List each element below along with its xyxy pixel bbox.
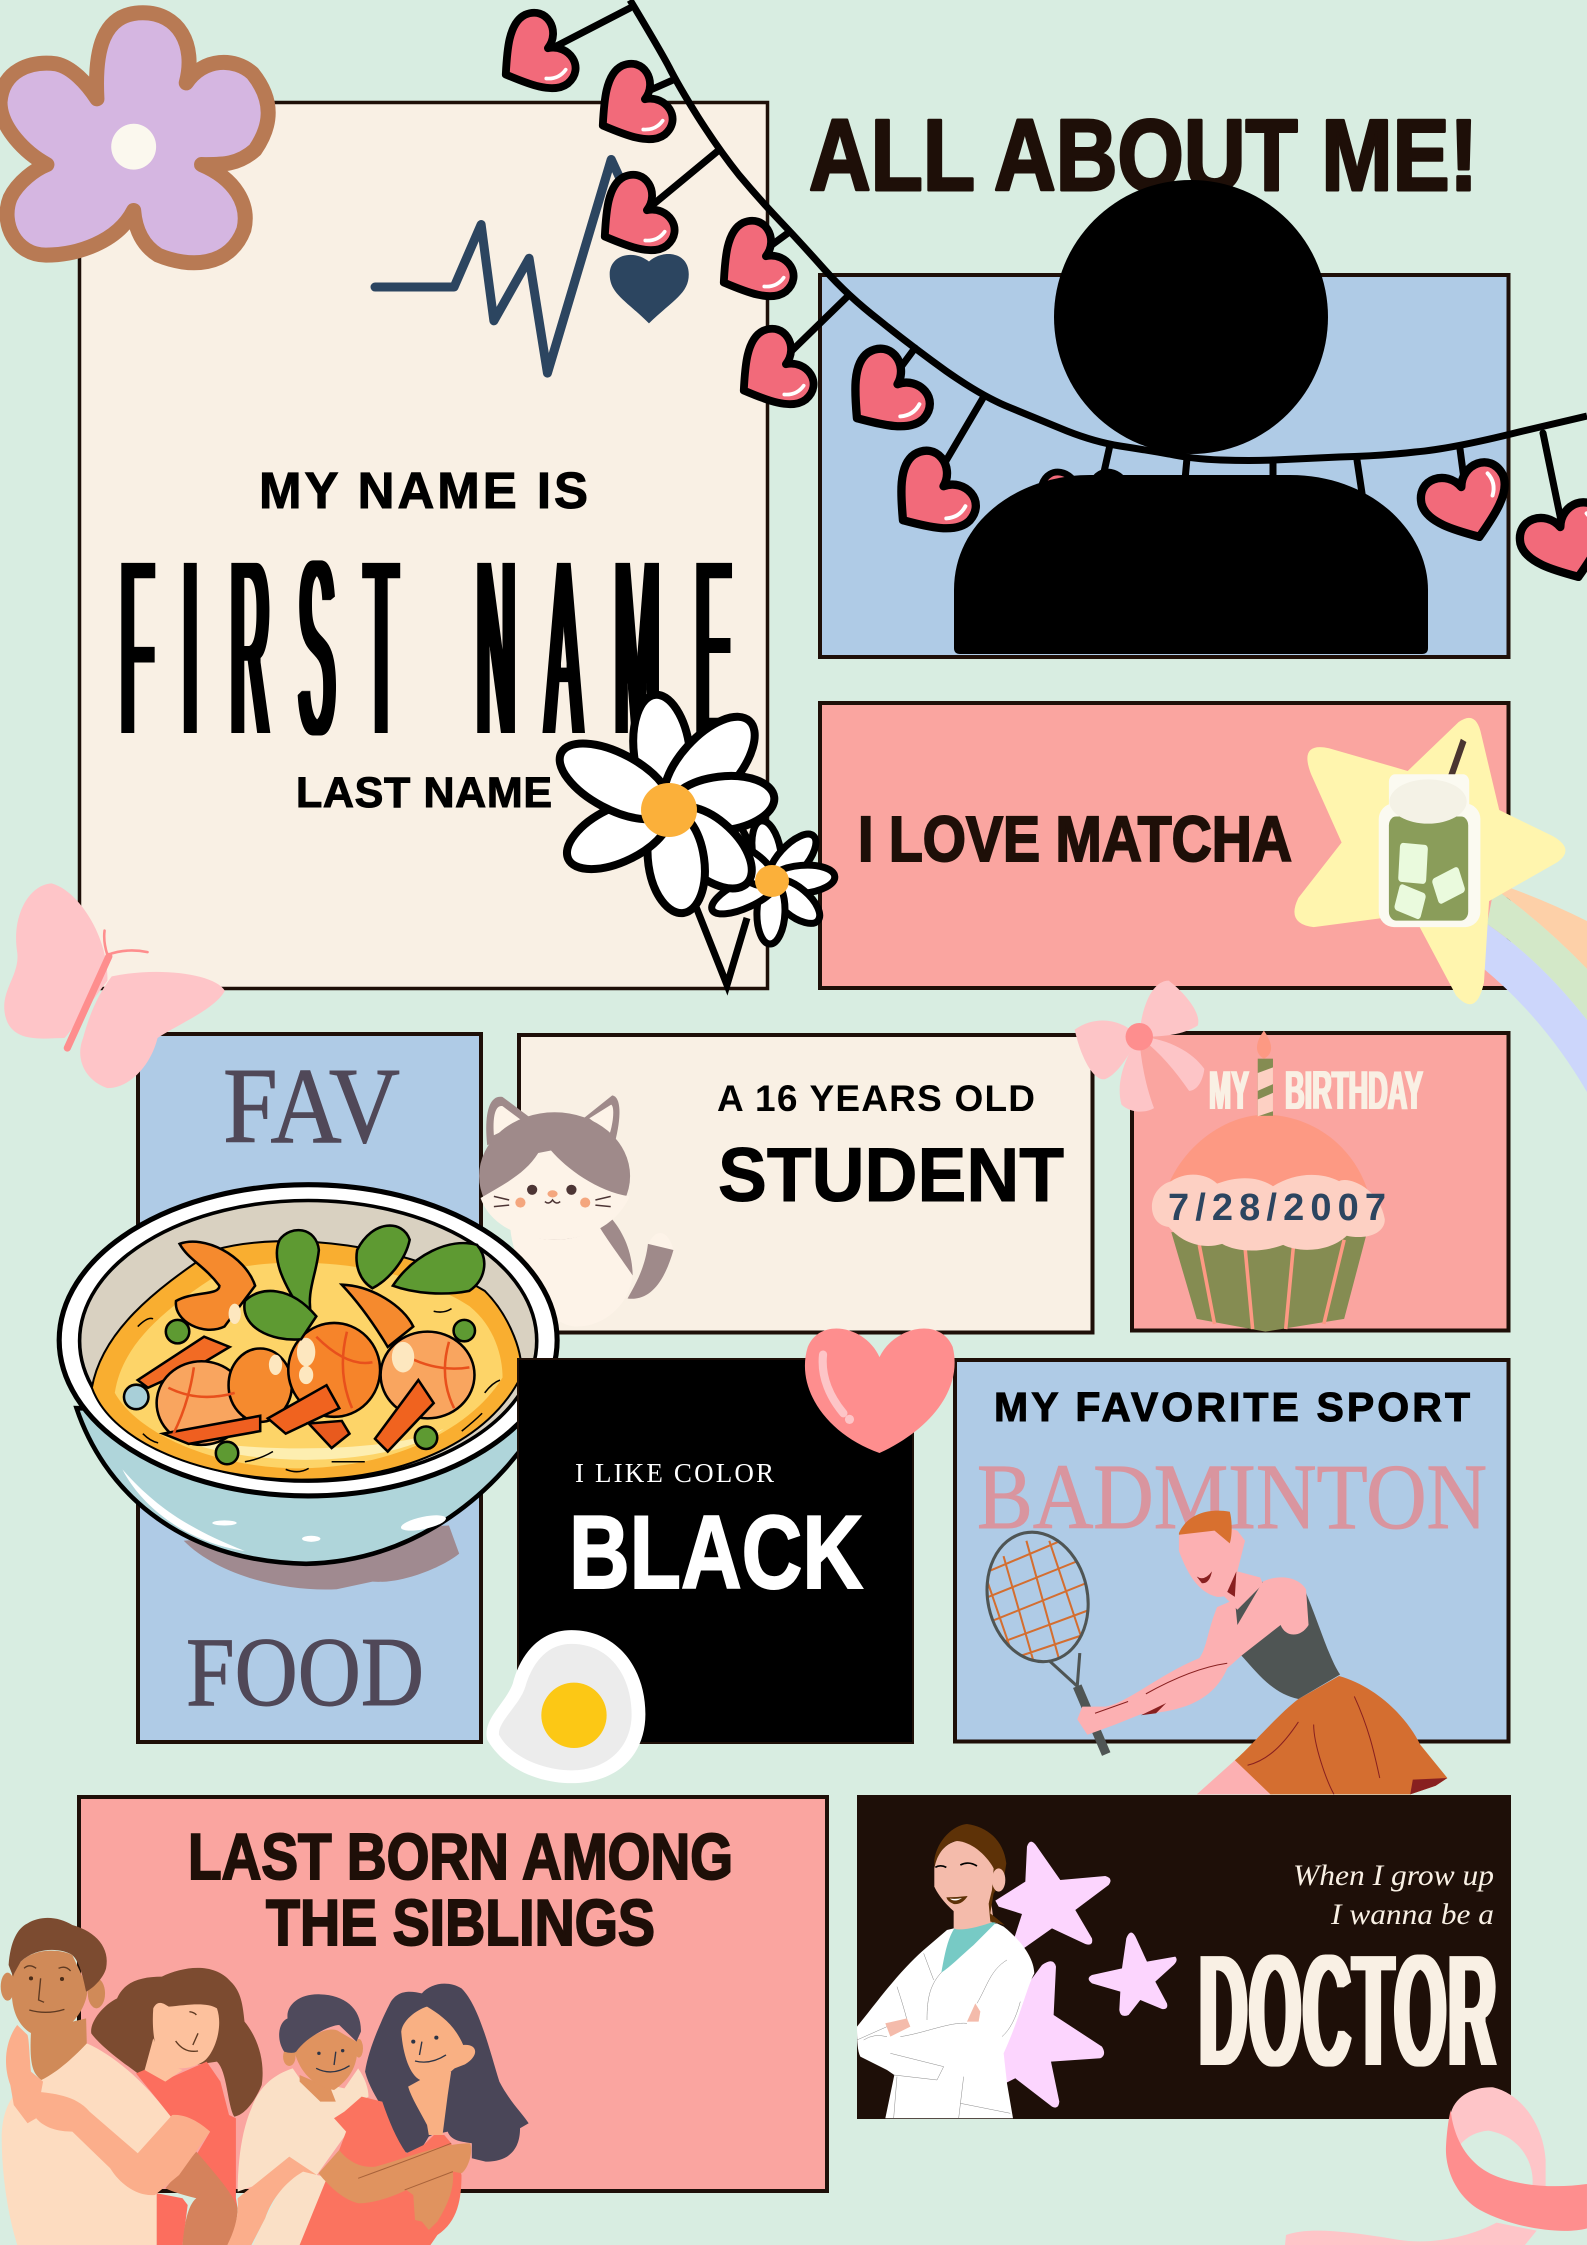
- name: last name: LAST NAME: [296, 769, 552, 817]
- panel: student: [519, 1035, 1092, 1332]
- boy: [227, 1994, 369, 2245]
- heart 11: [1514, 497, 1587, 592]
- icon: lilac flower: [0, 13, 268, 263]
- large daisy: [548, 691, 778, 917]
- photo placeholder: head silhouette: [1054, 180, 1328, 454]
- head: [1179, 1527, 1245, 1597]
- icon: daisies: [548, 691, 836, 985]
- icon: butterfly: [4, 883, 225, 1088]
- text: I love matcha: I LOVE MATCHA: [858, 803, 1292, 875]
- text: when I grow up: When I grow up: [1293, 1859, 1494, 1892]
- panel: name card: [80, 102, 768, 988]
- noodles: [92, 1241, 521, 1480]
- skirt: [1235, 1676, 1447, 1794]
- panel: birthday: [1132, 1031, 1508, 1332]
- heart 2: [581, 56, 680, 160]
- text: last born among: LAST BORN AMONG: [188, 1820, 733, 1893]
- decoration: rainbow trail: [1484, 885, 1587, 1092]
- icon: cat: [479, 1095, 673, 1327]
- heart 1: [484, 5, 583, 109]
- panel: favorite sport: [955, 1360, 1508, 1742]
- text: the siblings: THE SIBLINGS: [266, 1886, 655, 1959]
- decoration: pink ribbon: [1285, 2087, 1587, 2245]
- text: 16 years old: A 16 YEARS OLD: [717, 1078, 1035, 1119]
- text: my birthday: [1209, 1059, 1423, 1121]
- stars: [995, 1842, 1177, 2108]
- shrimp: [138, 1242, 474, 1452]
- text: date: 7/28/2007: [1168, 1187, 1386, 1229]
- arms: [1077, 1577, 1309, 1735]
- photo placeholder: body silhouette: [954, 475, 1428, 654]
- icon: shrimp noodle bowl: [59, 1185, 557, 1590]
- panel: photo placeholder: [820, 275, 1508, 657]
- text: food: FOOD: [186, 1618, 424, 1727]
- shrimp highlights: [168, 1304, 469, 1434]
- panel: black colour: [518, 1359, 913, 1743]
- icon: heartbeat line: [375, 159, 689, 373]
- text: badminton: BADMINTON: [977, 1446, 1487, 1549]
- small daisy: [707, 819, 836, 944]
- decoration: heart bunting: [484, 0, 1587, 592]
- heart 7: [875, 442, 984, 553]
- text: my birthday: MY: [1209, 1059, 1249, 1121]
- bowl shadow: [184, 1526, 459, 1590]
- racket: [975, 1523, 1106, 1754]
- label: my name is: MY NAME IS: [259, 462, 588, 519]
- leaves: [124, 1226, 484, 1464]
- doctor: [857, 1824, 1034, 2118]
- text: fav: FAV: [223, 1047, 400, 1166]
- panel: last born: [79, 1797, 827, 2191]
- text: black: BLACK: [569, 1495, 863, 1611]
- panel: birthday: BIRTHDAY: [1285, 1059, 1423, 1121]
- heart 3: [583, 167, 682, 271]
- bowl body: [77, 1408, 542, 1564]
- panel: I love matcha: [820, 703, 1508, 988]
- panel: doctor: [857, 1795, 1511, 2119]
- name: first name: FIRST NAME: [121, 507, 731, 789]
- text: my favorite sport: MY FAVORITE SPORT: [994, 1384, 1470, 1430]
- text: I like color: I LIKE COLOR: [575, 1458, 774, 1488]
- heart 6: [829, 340, 938, 451]
- top: [1235, 1582, 1340, 1699]
- icon: fried egg: [487, 1630, 645, 1783]
- heart 4: [702, 213, 801, 317]
- neck: [1222, 1571, 1263, 1610]
- text: student: STUDENT: [718, 1133, 1064, 1218]
- leg: [1197, 1760, 1273, 1794]
- woman: [36, 1968, 263, 2245]
- illustration: family: [1, 1918, 529, 2245]
- title: ALL ABOUT ME!: [809, 100, 1478, 212]
- text: I wanna be a: I wanna be a: [1330, 1898, 1494, 1931]
- illustration: tennis player: [975, 1511, 1447, 1794]
- heart 10: [1415, 457, 1520, 552]
- heart 9 hidden: [1085, 469, 1164, 538]
- illustration: stars and doctor: [857, 1824, 1177, 2118]
- bunting string: [630, 0, 1587, 460]
- daisy stems: [683, 874, 747, 985]
- man: [1, 1918, 172, 2245]
- girl: [300, 1984, 529, 2245]
- panel: fav food: [138, 1034, 481, 1742]
- heart 8 hidden: [1035, 469, 1114, 538]
- icon: cupcake: [1152, 1031, 1385, 1332]
- icon: star with matcha jar: [1294, 718, 1565, 1004]
- icon: pink bow: [1075, 981, 1204, 1112]
- icon: pink heart: [805, 1328, 955, 1453]
- bowl rim: [59, 1185, 557, 1496]
- bunting hangers: [541, 8, 1565, 540]
- heart 5: [722, 321, 821, 425]
